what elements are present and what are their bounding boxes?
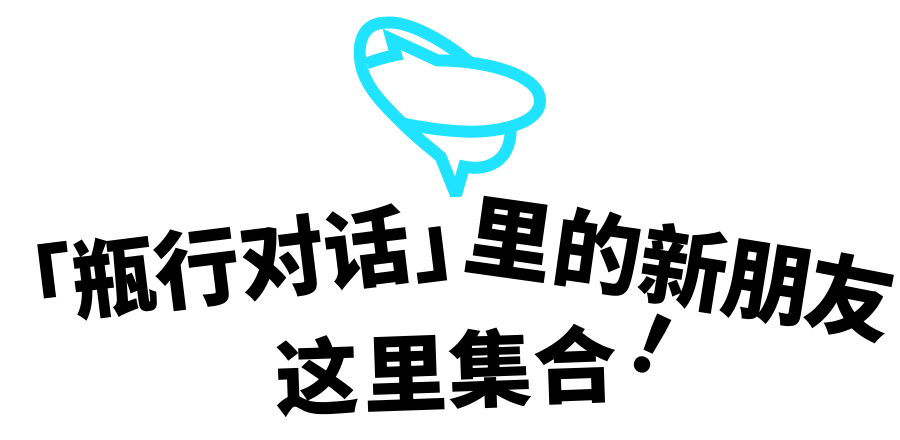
title line 1: 「瓶行对话」: 行: [149, 218, 246, 324]
title line 1: 里的新朋友: 友: [797, 243, 900, 356]
title line 1: 里的新朋友: 里: [458, 186, 559, 297]
title line 2: 这里集合: 这: [273, 331, 361, 427]
title line 1: 里的新朋友: 朋: [716, 229, 818, 340]
title line 1: 里的新朋友: 的: [546, 199, 647, 310]
icon: speech bubble: [360, 23, 540, 195]
title line 2: 这里集合: 里: [361, 328, 449, 424]
title line 1: 「瓶行对话」: 」: [406, 189, 503, 295]
title line 2: 这里集合: [273, 319, 619, 427]
title line 1: 「瓶行对话」: 对: [234, 208, 331, 314]
title line 2: 这里集合: 合: [531, 319, 619, 415]
title line 1: 里的新朋友: [458, 186, 900, 356]
title line 2: 这里集合: 集: [446, 323, 534, 419]
exclamation mark: ！: [614, 297, 724, 412]
title line 1: 「瓶行对话」: 瓶: [66, 227, 163, 333]
title line 1: 「瓶行对话」: 话: [319, 198, 416, 304]
title line 1: 「瓶行对话」: [0, 189, 503, 343]
title line 1: 里的新朋友: 新: [632, 215, 734, 326]
